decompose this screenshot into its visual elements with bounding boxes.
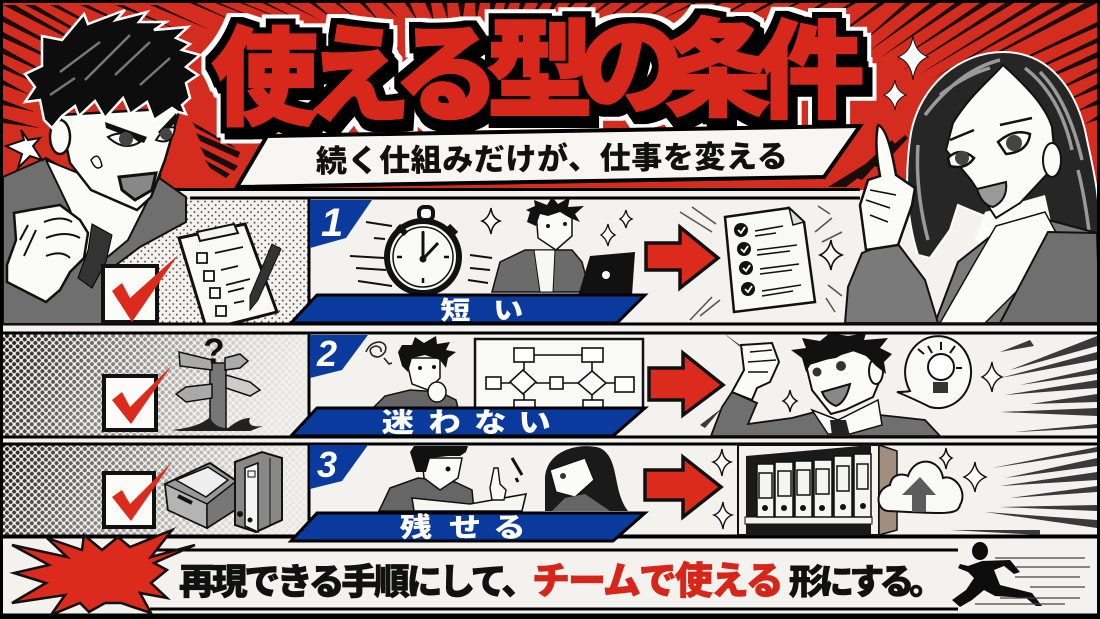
subtitle band [237,126,860,187]
number tab 2: 2 [316,333,337,374]
blue label band 2: い [518,408,551,438]
man eyes and brows [105,113,178,143]
panel 1 frame lines [3,198,1097,324]
panel: condition 2 no hesitation [3,332,1097,438]
checkbox 3 [104,462,172,527]
icon: speech bubble with lightbulb [897,336,971,408]
blue label band 2 [291,408,645,438]
blue label band 3 [291,513,645,543]
icon: binder shelf [738,445,897,535]
woman blouse [940,212,1060,323]
blue label band 3: る [493,513,526,543]
panel: condition 3 kept records [3,444,1097,536]
checkbox 1 [103,255,178,322]
man with clenched fist [3,10,200,324]
arrow 3 [645,457,721,517]
icon: storage box [165,463,235,528]
checkbox 2 [104,365,172,430]
doc burst lines and sparkle [680,206,842,320]
blue label band 2: 迷 [382,408,414,438]
icon: binders [235,452,282,532]
man fist [7,205,88,302]
woman pointing hand [860,125,915,250]
number tab 2 [310,333,368,378]
sparkles by woman [884,36,928,110]
speed lines panel 3 [950,447,1097,535]
icon: signpost with question mark [172,332,263,431]
subtitle band: 続く仕組みだけが、仕事を変える [316,139,789,179]
blue label band 1: 短 [440,296,470,324]
sparkles panel 2 [783,362,1002,412]
panel 2 left halftone cell [3,333,308,437]
speed lines panel 2 [700,332,1097,432]
explosion burst [12,530,195,615]
woman sleeve [845,240,938,323]
arrow 2 [649,353,723,415]
blue label band 3: せ [449,513,481,543]
icon: sparkle [482,208,500,234]
woman eyes [948,132,1030,167]
icon: stopwatch [350,207,492,293]
thinking person [373,336,458,408]
panel 3 left halftone cell [3,444,308,536]
panel 1 right cell [310,198,1100,324]
number tab 1 [310,200,372,248]
blue label band 1: い [493,296,523,324]
icon: checklist document [725,208,815,312]
closing message text: チームで使える [532,561,782,603]
icon: running silhouette [952,542,1090,607]
sparkles near laptop [601,210,632,246]
blue label band 3: 残 [400,513,432,543]
man mouth [119,173,156,200]
sparkles panel 3 [713,448,986,529]
blue label band 1 [291,295,645,324]
woman hair highlights [917,60,1092,262]
number tab 3: 3 [317,444,337,485]
woman face [946,65,1055,218]
man and woman reading a document [379,446,628,511]
arrow 1 [646,227,718,288]
closing message text: 形にする。 [789,563,939,602]
bottom message strip [0,530,1100,616]
woman presenter [845,52,1100,323]
icon: clipboard and pen [179,224,281,324]
number tab 1: 1 [321,201,343,245]
woman mouth [977,182,1006,207]
icon: cloud upload [878,462,962,513]
number tab 3 [310,444,368,489]
woman jacket [935,218,1100,323]
icon: signpost with question mark: ? [203,332,225,371]
person working at laptop [492,197,635,296]
closing message text: 再現できる手順にして、 [179,561,534,602]
panel 1 left halftone cell [60,198,308,324]
man hair [25,10,200,128]
excited man with raised fist [711,333,940,436]
red header panel with burst lines [3,3,1097,190]
anger mark [6,130,42,168]
flowchart box [475,339,643,408]
blue label band 2: わ [428,408,461,438]
man hair highlights [50,35,170,95]
panel: condition 1 short [3,188,1100,324]
woman neck [975,195,1055,262]
title: 使える型の条件 [212,10,864,139]
blue label band 2: な [474,408,506,438]
icon: confusion squiggle [366,342,392,364]
